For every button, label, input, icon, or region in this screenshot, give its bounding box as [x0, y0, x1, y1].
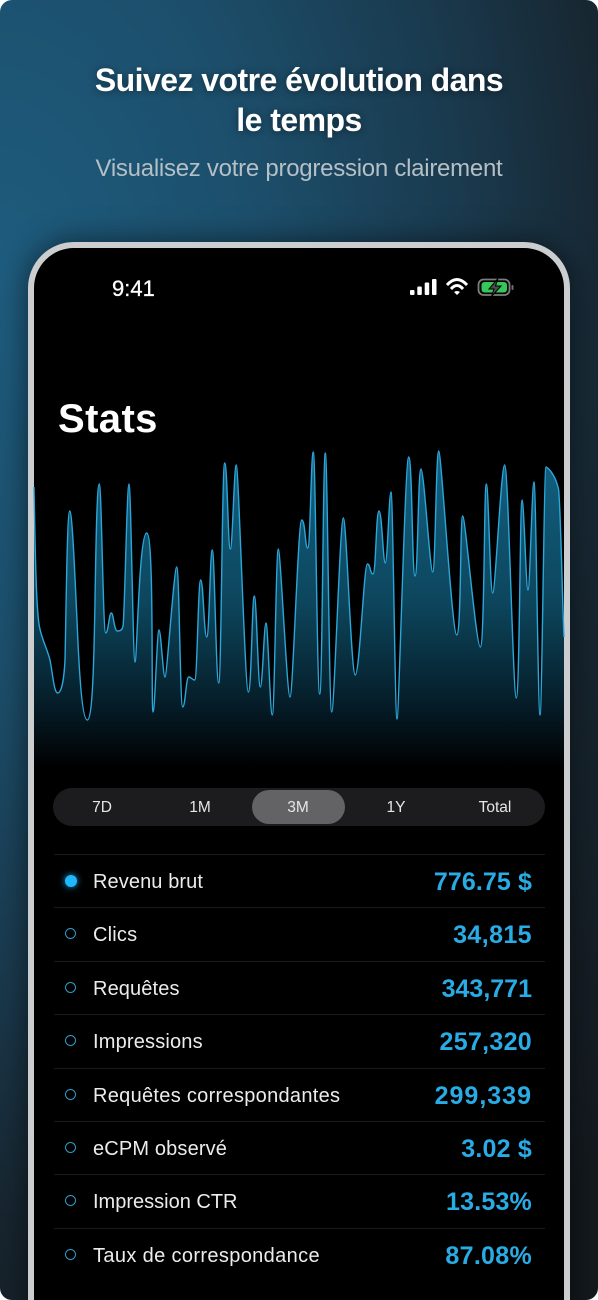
row: Revenu brut: [54, 854, 545, 908]
row: Requêtes: Requêtes: [93, 978, 180, 1000]
title: Suivez votre évolution dans: [95, 62, 503, 98]
row: Taux de correspondance: Taux de correspondance: [93, 1245, 320, 1267]
row: Impression CTR: 13.53%: [446, 1188, 532, 1216]
row: Requêtes correspondantes: [54, 1068, 545, 1122]
selected period highlight: [252, 790, 345, 824]
row: Impressions: Impressions: [93, 1031, 203, 1053]
row: Impressions: 257,320: [440, 1028, 532, 1056]
row: Clics: Clics: [93, 924, 137, 946]
row: Impressions: [54, 1014, 545, 1068]
period 3M: 3M: [287, 799, 309, 816]
row: eCPM observé: 3.02 $: [461, 1135, 532, 1163]
subtitle: Visualisez votre progression clairement: [96, 155, 502, 182]
period Total: Total: [479, 799, 511, 816]
row: eCPM observé: [54, 1121, 545, 1175]
row: Impression CTR: Impression CTR: [93, 1191, 237, 1213]
icon: wifi: [446, 278, 468, 295]
heading: Stats: Stats: [58, 397, 158, 441]
period selector: [53, 788, 545, 826]
period 1M: 1M: [189, 799, 211, 816]
icon: charging battery: [478, 278, 514, 296]
row: Impression CTR: [54, 1174, 545, 1228]
period 7D: 7D: [92, 799, 112, 816]
status bar time: 9:41: [112, 276, 155, 301]
row: Taux de correspondance: [54, 1228, 545, 1282]
title: [94, 62, 503, 139]
period 1Y: 1Y: [387, 799, 405, 816]
title: le temps: [236, 102, 362, 138]
line chart: [33, 450, 565, 756]
row: Requêtes: 343,771: [442, 975, 532, 1003]
row: Clics: 34,815: [453, 921, 532, 949]
row: Requêtes correspondantes: 299,339: [435, 1082, 532, 1110]
row: Taux de correspondance: 87.08%: [445, 1242, 532, 1270]
phone frame: [28, 242, 570, 1300]
row: Requêtes correspondantes: Requêtes correspondantes: [93, 1085, 340, 1107]
row: eCPM observé: eCPM observé: [93, 1138, 227, 1160]
row: Requêtes: [54, 961, 545, 1015]
row: Clics: [54, 907, 545, 961]
icon: cellular signal: [410, 279, 436, 295]
row: Revenu brut: 776.75 $: [434, 868, 532, 896]
row: Revenu brut: Revenu brut: [93, 871, 203, 893]
